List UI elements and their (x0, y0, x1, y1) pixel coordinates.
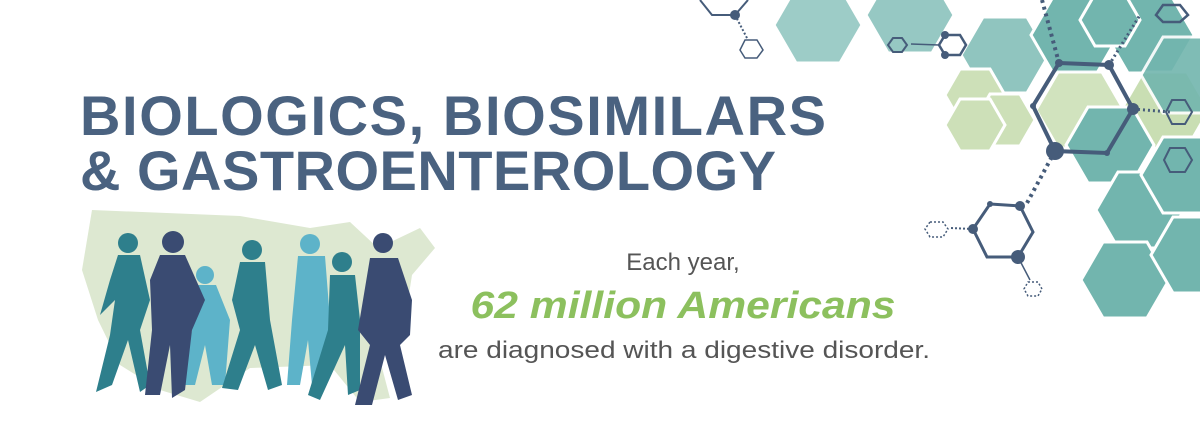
title: BIOLOGICS, BIOSIMILARS (80, 84, 826, 147)
title (80, 84, 826, 202)
person 3 child (182, 266, 230, 385)
statistic text: Each year, (626, 249, 740, 276)
title: & GASTROENTEROLOGY (80, 139, 776, 202)
map and people illustration (82, 210, 435, 405)
statistic text: are diagnosed with a digestive disorder. (438, 337, 930, 364)
molecule: large hexagon (700, 0, 1192, 296)
molecule nodes (730, 10, 1139, 264)
statistic text (438, 249, 930, 364)
person 1 (96, 233, 150, 392)
person 7 (355, 233, 412, 405)
person 2 (145, 231, 205, 398)
statistic text: 62 million Americans (470, 285, 896, 327)
person 5 (287, 234, 330, 385)
hexagon cluster (774, 0, 1200, 318)
person 4 (222, 240, 282, 390)
person 6 (308, 252, 360, 400)
